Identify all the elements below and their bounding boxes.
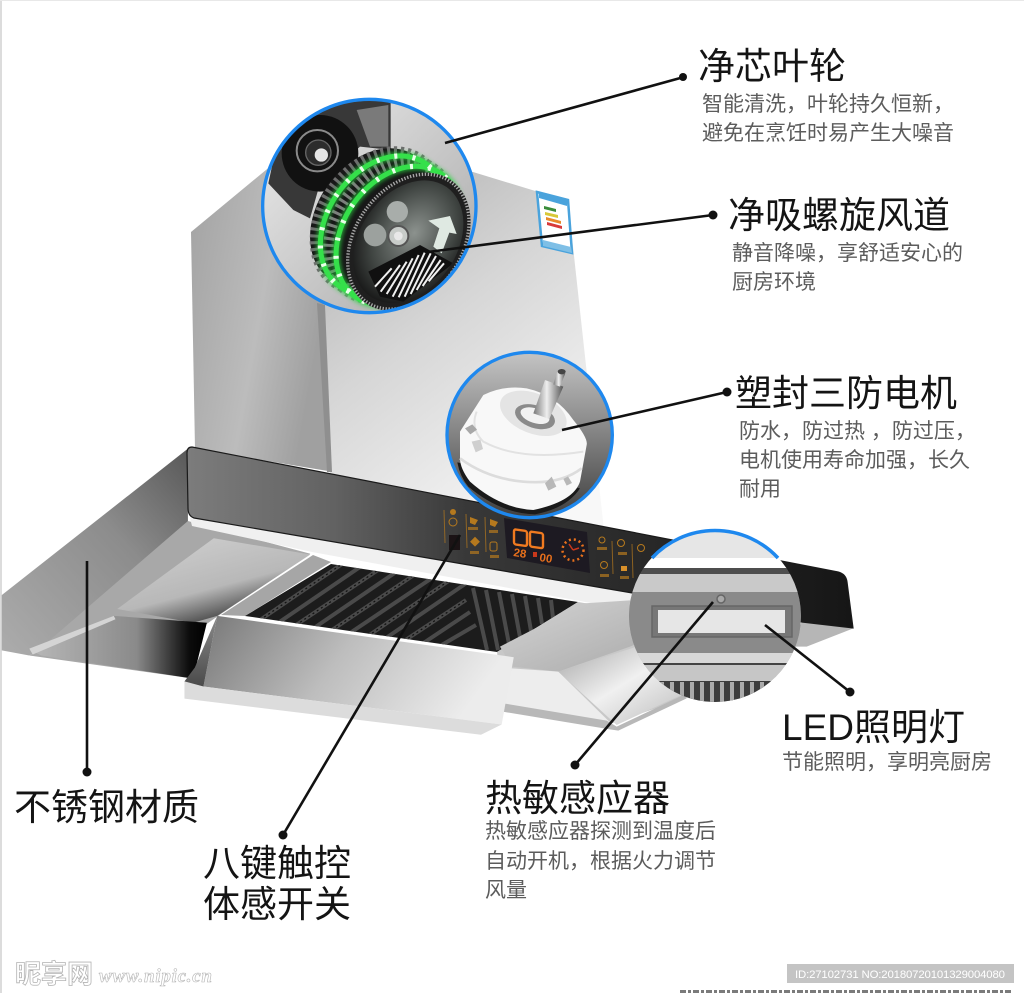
callout line: touch keys bbox=[278, 535, 460, 840]
text: motor: 塑封三防电机 bbox=[735, 373, 957, 414]
canopy side band bbox=[2, 449, 188, 656]
callout line: impeller bbox=[445, 73, 687, 143]
oil cup bbox=[184, 616, 514, 735]
image ID box: ID:27102731 NO:20180720101329004080 bbox=[795, 969, 1005, 981]
range hood illustration bbox=[2, 165, 853, 735]
right wing of canopy bbox=[497, 600, 853, 731]
left canopy bbox=[2, 449, 310, 679]
white lip under control panel bbox=[190, 518, 640, 612]
blue arc bbox=[652, 531, 778, 558]
image ID box bbox=[787, 964, 1014, 983]
text: spiral duct bbox=[728, 195, 963, 294]
magnifier: LED lamp bbox=[620, 530, 810, 703]
text: impeller bbox=[698, 46, 954, 145]
text: impeller: 净芯叶轮 bbox=[698, 46, 846, 87]
watermark logo bbox=[15, 959, 212, 989]
callout line: stainless steel bbox=[82, 561, 92, 776]
watermark logo: 昵享网 bbox=[15, 959, 93, 989]
text: motor: 电机使用寿命加强，长久 bbox=[739, 449, 970, 472]
text: thermal sensor: 风量 bbox=[485, 879, 527, 902]
canopy lower rim bbox=[29, 521, 310, 679]
text: impeller: 避免在烹饪时易产生大噪音 bbox=[702, 122, 954, 145]
text: motor: 耐用 bbox=[739, 478, 781, 501]
cropped bottom strip bbox=[680, 990, 1012, 993]
motor housing behind impeller bbox=[268, 98, 391, 218]
thermal sensor hole bbox=[717, 595, 725, 603]
text: thermal sensor: 热敏感应器探测到温度后 bbox=[485, 820, 716, 843]
canopy recessed pocket bbox=[31, 616, 207, 679]
text: touch keys bbox=[203, 843, 351, 925]
text: spiral duct: 净吸螺旋风道 bbox=[728, 195, 950, 236]
text: spiral duct: 静音降噪，享舒适安心的 bbox=[732, 242, 963, 265]
display screen: 28 bbox=[513, 547, 528, 561]
text: thermal sensor: 热敏感应器 bbox=[485, 778, 670, 819]
text: impeller: 智能清洗，叶轮持久恒新， bbox=[702, 93, 954, 116]
impeller front face bbox=[346, 172, 471, 310]
motor body bbox=[460, 382, 587, 510]
text: LED: 节能照明，享明亮厨房 bbox=[782, 751, 992, 774]
text: touch keys: 体感开关 bbox=[203, 884, 351, 925]
touch keys left bbox=[444, 509, 499, 558]
watermark logo: www.nipic.cn bbox=[99, 966, 212, 987]
callout line: thermal sensor bbox=[570, 602, 713, 770]
display screen: 00 bbox=[539, 552, 553, 566]
text: stainless steel: 不锈钢材质 bbox=[14, 787, 199, 828]
text: thermal sensor: 自动开机，根据火力调节 bbox=[485, 850, 716, 873]
black control panel bbox=[187, 447, 853, 628]
text: thermal sensor bbox=[485, 778, 716, 902]
motor shadow bbox=[457, 462, 580, 514]
magnifier: motor bbox=[447, 352, 612, 518]
text: motor bbox=[735, 373, 976, 501]
callout line: motor bbox=[562, 388, 732, 430]
display screen bbox=[504, 518, 590, 573]
text: spiral duct: 厨房环境 bbox=[732, 271, 816, 294]
text: LED bbox=[782, 707, 992, 774]
energy label sticker bbox=[537, 192, 572, 253]
text: LED: LED照明灯 bbox=[782, 707, 965, 748]
touch keys right bbox=[597, 537, 644, 579]
chimney cover bbox=[191, 165, 604, 530]
callout line: LED bbox=[765, 625, 854, 696]
callout line: spiral duct bbox=[428, 210, 718, 252]
LED lamp strip bbox=[652, 606, 792, 637]
text: touch keys: 八键触控 bbox=[203, 843, 351, 884]
strip above grille bbox=[221, 555, 331, 616]
impeller drum bbox=[310, 146, 465, 311]
text: motor: 防水，防过热 ，防过压， bbox=[739, 420, 976, 443]
canopy inner plate bbox=[117, 538, 310, 623]
motor shaft bbox=[533, 369, 566, 419]
grease filter grille bbox=[245, 562, 578, 652]
magnifier: impeller bbox=[261, 98, 478, 314]
